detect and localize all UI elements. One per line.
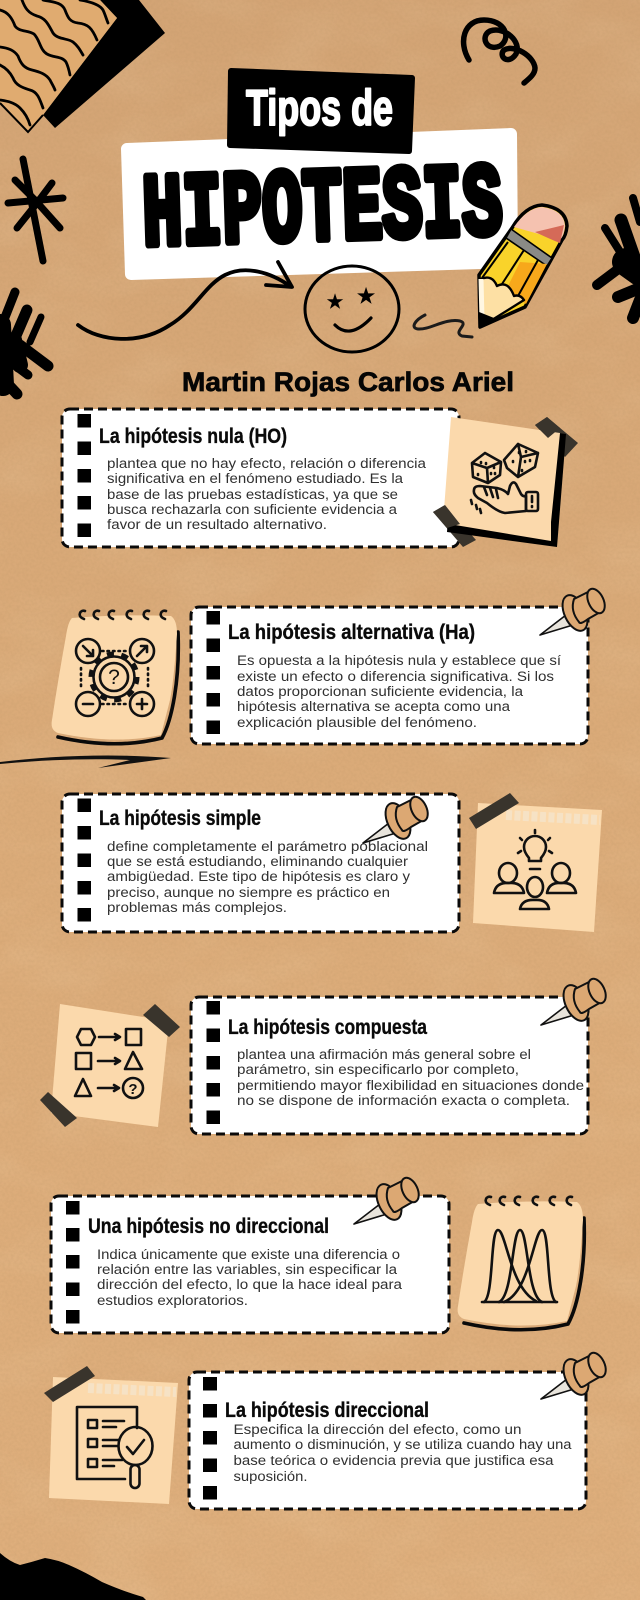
heading: La hipótesis nula (HO) xyxy=(99,425,287,448)
icon: question gear with arrows: ? xyxy=(108,666,120,689)
text block: hipótesis alternativa se acepta como una xyxy=(237,699,511,714)
decoration: asterisk scribble xyxy=(8,159,63,261)
text block: ambigüedad. Este tipo de hipótesis es claro y xyxy=(107,869,410,884)
note: checklist icon xyxy=(44,1366,178,1504)
text block: relación entre las variables, sin especificar la xyxy=(97,1262,398,1277)
text block: favor de un resultado alternativo. xyxy=(107,517,327,532)
decoration: scribble line xyxy=(0,755,171,768)
text block: busca rechazarla con suficiente evidencia a xyxy=(107,502,398,517)
icon: bell curves xyxy=(482,1230,557,1302)
bullet squares xyxy=(206,611,220,734)
heading: La hipótesis direccional xyxy=(225,1399,429,1422)
white title panel xyxy=(127,134,512,274)
text block xyxy=(107,839,428,915)
text block: existe un efecto o diferencia significativa. Si los xyxy=(237,669,554,684)
smiley face: ★ xyxy=(326,291,344,313)
text block: problemas más complejos. xyxy=(107,900,287,915)
note: people and idea icon xyxy=(469,793,602,932)
curved arrow xyxy=(78,262,292,339)
note: gear notebook xyxy=(52,611,178,744)
text block xyxy=(107,456,427,532)
panel: hipótesis direccional xyxy=(189,1372,586,1509)
text block: que se está estudiando, eliminando cualquier xyxy=(107,854,409,869)
text block: estudios exploratorios. xyxy=(97,1293,248,1308)
text block: Especifica la dirección del efecto, como un xyxy=(234,1422,522,1437)
pencil icon xyxy=(479,205,567,327)
title block xyxy=(127,71,512,276)
text block: preciso, aunque no siempre es práctico en xyxy=(107,885,390,900)
text block xyxy=(234,1422,572,1484)
icon: push pin xyxy=(363,794,431,843)
text block: plantea una afirmación más general sobre el xyxy=(237,1047,531,1062)
panel: hipótesis no direccional xyxy=(51,1196,449,1333)
decoration: spiral scribble xyxy=(464,20,535,83)
pencil squiggle xyxy=(414,315,472,337)
author name: Martin Rojas Carlos Ariel xyxy=(182,367,514,397)
note: shapes icon xyxy=(40,1004,180,1127)
panel: hipótesis simple xyxy=(62,794,459,932)
text block: define completamente el parámetro poblacional xyxy=(107,839,428,854)
text block: suposición. xyxy=(234,1469,308,1484)
note: dice icon xyxy=(433,417,578,547)
text block: explicación plausible del fenómeno. xyxy=(237,715,477,730)
bullet squares xyxy=(78,798,91,922)
text block xyxy=(237,1047,584,1108)
card box xyxy=(191,997,588,1134)
icon: push pin xyxy=(541,1350,609,1399)
text block xyxy=(237,653,561,730)
card box xyxy=(51,1196,449,1333)
icon: dice and hand xyxy=(471,444,538,513)
icon: idea bulb and three people xyxy=(494,830,576,909)
heading: La hipótesis simple xyxy=(99,807,261,830)
panel: hipótesis compuesta xyxy=(191,997,588,1134)
text block xyxy=(97,1247,403,1308)
black label xyxy=(230,71,412,151)
bullet squares xyxy=(78,414,91,537)
text block: plantea que no hay efecto, relación o diferencia xyxy=(107,456,427,471)
panel: hipótesis nula xyxy=(62,409,459,547)
bullet squares xyxy=(203,1377,217,1500)
bullet squares xyxy=(206,1001,220,1124)
decoration: wavy striped diamond xyxy=(0,0,165,132)
card box xyxy=(189,1372,586,1509)
heading: Una hipótesis no direccional xyxy=(88,1215,329,1238)
heading: La hipótesis alternativa (Ha) xyxy=(228,621,475,644)
text block: Indica únicamente que existe una diferencia o xyxy=(97,1247,400,1262)
text block: datos proporcionan suficiente evidencia, la xyxy=(237,684,524,699)
text block: base de las pruebas estadísticas, ya que se xyxy=(107,487,398,502)
note: bell curves notebook xyxy=(458,1197,584,1330)
text block: permitiendo mayor flexibilidad en situaciones donde xyxy=(237,1078,584,1093)
decoration: left ink scribble xyxy=(0,292,48,394)
icon: push pin xyxy=(541,976,609,1025)
heading: Tipos de: Tipos de xyxy=(246,80,393,136)
text block: significativa en el fenómeno estudiado. Es la xyxy=(107,471,404,486)
card box xyxy=(62,409,459,547)
card box xyxy=(62,794,459,932)
heading: La hipótesis compuesta xyxy=(228,1016,427,1039)
text block: no se dispone de información exacta o completa. xyxy=(237,1093,570,1108)
text block: Es opuesta a la hipótesis nula y establece que sí xyxy=(237,653,561,668)
icon: push pin xyxy=(540,586,608,635)
bullet squares xyxy=(66,1201,80,1324)
icon: push pin xyxy=(354,1175,422,1224)
card box xyxy=(191,607,588,744)
text block: dirección del efecto, lo que la hace ideal para xyxy=(97,1277,403,1292)
text block: aumento o disminución, y se utiliza cuando hay una xyxy=(234,1437,572,1452)
icon: checklist with magnifier xyxy=(77,1407,152,1488)
text block: base teórica o evidencia previa que justifica esa xyxy=(234,1453,554,1468)
icon: shape transformations: ? xyxy=(128,1081,138,1098)
decoration: right ink scribble xyxy=(597,198,640,318)
smiley face: ★ xyxy=(357,284,375,308)
text block: parámetro, sin especificarlo por completo, xyxy=(237,1062,519,1077)
smiley face xyxy=(305,266,399,352)
panel: hipótesis alternativa xyxy=(191,607,588,744)
decoration: torn black paper corner xyxy=(0,1553,146,1600)
